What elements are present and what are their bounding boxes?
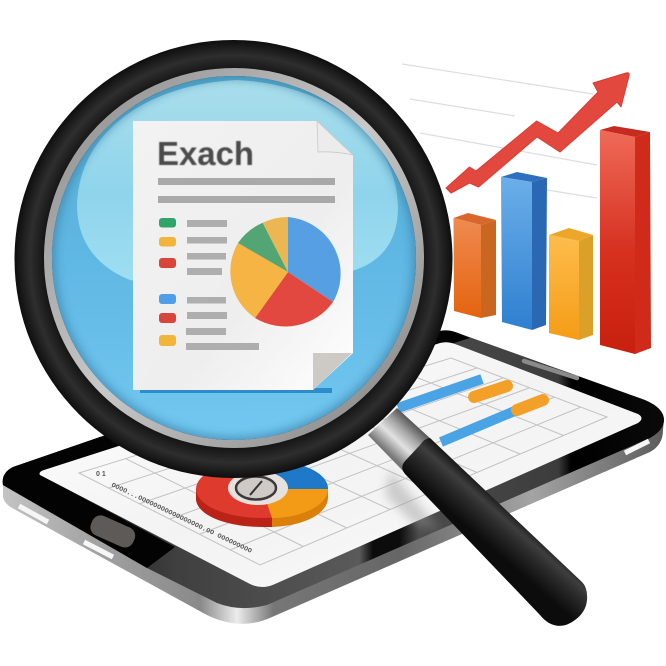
chart background guide lines: [402, 64, 597, 198]
handle: metal neck: [368, 408, 432, 472]
tablet: data grid: [79, 358, 607, 565]
document: legend lines: [186, 220, 259, 350]
tablet: small text row: oooo...ooooooooooooooooo.oo ooooooooo: [110, 481, 254, 556]
tablet: home button: [88, 513, 138, 550]
document: pie chart: [230, 217, 341, 326]
tablet: front bezel: [3, 330, 664, 608]
lens: glass: [52, 76, 416, 440]
tablet: side buttons: [19, 441, 649, 557]
lens: glare: [77, 80, 398, 288]
document: legend chips: [159, 218, 176, 346]
bar: red: [600, 126, 651, 354]
bar: blue: [501, 172, 547, 330]
document: shadow: [140, 388, 332, 393]
bar: orange: [454, 213, 496, 318]
lens: black rim: [14, 40, 452, 478]
trend arrow: [446, 73, 629, 193]
document: bottom fold: [313, 353, 352, 390]
tablet: [3, 330, 664, 624]
document: page: [133, 121, 353, 390]
tablet: screen: [40, 342, 642, 587]
tablet: handle shadow: [385, 470, 440, 530]
document: top fold: [317, 121, 353, 155]
tablet: silver edge: [3, 418, 664, 624]
document: heading lines: [158, 178, 335, 203]
lens: inner shadow: [50, 74, 418, 442]
lens: silver ring: [48, 72, 420, 444]
handle: black grip: [402, 438, 587, 626]
bar chart: [454, 126, 651, 354]
document: [133, 121, 353, 393]
tablet: speaker: [524, 361, 577, 378]
tablet: 3D donut chart: [196, 460, 328, 527]
tablet: blue and orange bars: [398, 379, 543, 442]
tablet: black lower-left bezel: [3, 330, 470, 568]
document: title: Exach: [157, 135, 254, 172]
tablet: small axis marks: 0 1: [96, 471, 106, 478]
bar: yellow: [549, 228, 593, 340]
magnifying glass: [14, 40, 587, 626]
